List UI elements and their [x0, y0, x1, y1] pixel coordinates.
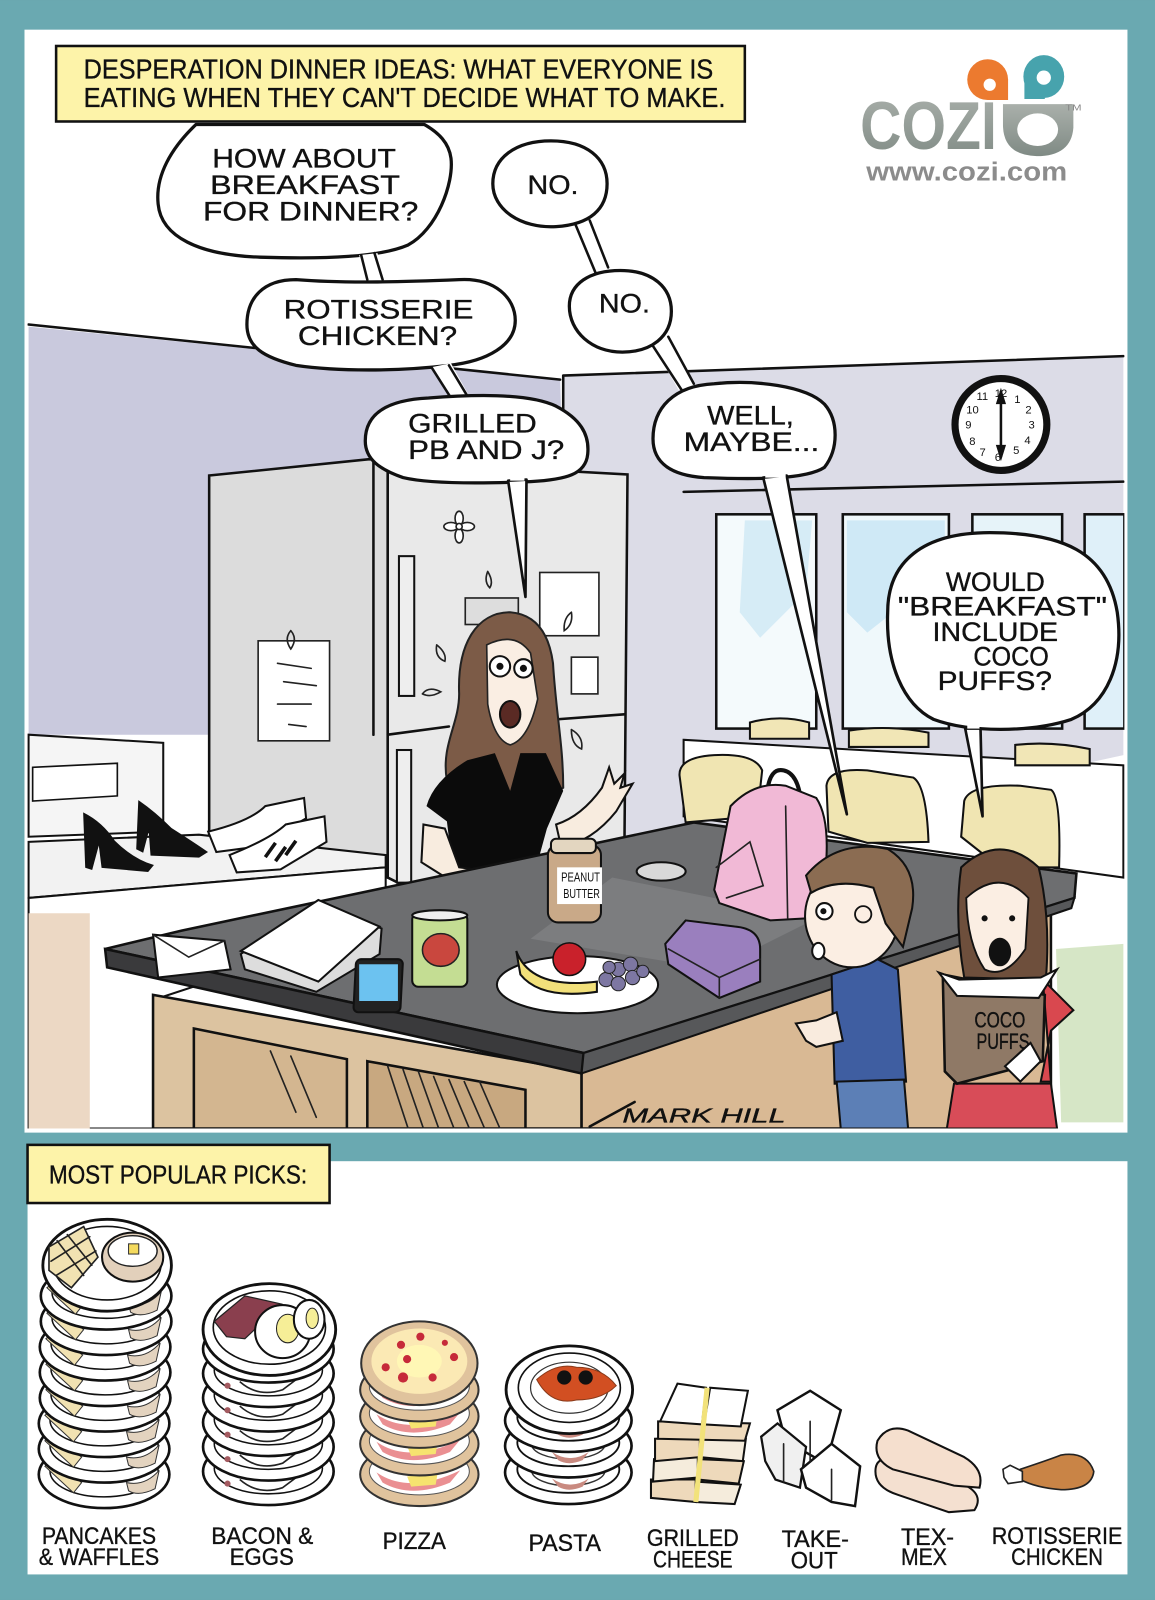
envelope	[153, 935, 231, 978]
food labels: PIZZA	[383, 1528, 446, 1555]
food labels: EGGS	[230, 1544, 294, 1571]
clock: 10	[966, 404, 979, 416]
speech bubble: well maybe: WELL,	[707, 401, 794, 431]
note on fridge side	[258, 631, 330, 741]
peanut butter jar: PEANUT	[561, 870, 600, 885]
speech bubble: no: NO.	[528, 170, 579, 200]
food labels: ROTISSERIE	[992, 1523, 1122, 1550]
food labels: BACON &	[211, 1523, 313, 1550]
left wall	[29, 327, 563, 735]
clock: 5	[1013, 445, 1019, 457]
coco puffs box	[939, 969, 1057, 1084]
takeout boxes	[761, 1391, 860, 1506]
food labels: & WAFFLES	[39, 1544, 159, 1571]
panel: popular picks	[28, 1145, 1127, 1574]
speech bubble: coco puffs: INCLUDE	[933, 617, 1058, 647]
stack: pizza	[360, 1321, 479, 1506]
food labels: OUT	[791, 1547, 838, 1574]
clock	[955, 379, 1047, 470]
food labels: GRILLED	[647, 1525, 739, 1552]
speech bubble: rotisserie chicken	[247, 253, 515, 370]
food labels: TEX-	[901, 1524, 954, 1551]
boy	[796, 847, 913, 1129]
speech bubble: how about breakfast: BREAKFAST	[210, 170, 400, 200]
clock: 6	[995, 452, 1001, 464]
clock: 2	[1025, 404, 1032, 416]
logo: cozi: COZI	[860, 89, 997, 164]
stack: pasta	[505, 1346, 633, 1504]
magnets and notes	[422, 511, 599, 749]
papers	[241, 900, 382, 992]
clock: 3	[1028, 420, 1035, 432]
speech bubble: grilled pb and j: PB AND J?	[408, 435, 564, 465]
speech bubble: how about breakfast: HOW ABOUT	[212, 143, 396, 173]
speech bubble: rotisserie chicken: ROTISSERIE	[284, 294, 473, 324]
coco puffs box: COCO	[974, 1008, 1025, 1033]
fridge	[209, 459, 627, 888]
speech bubble: how about breakfast: FOR DINNER?	[203, 196, 418, 226]
green floor	[1056, 944, 1123, 1122]
logo: cozi: www.cozi.com	[865, 159, 1067, 187]
food labels: CHICKEN	[1011, 1544, 1103, 1571]
speech bubble: grilled pb and j: GRILLED	[408, 409, 537, 439]
stack: pancakes and waffles	[39, 1219, 171, 1508]
backpack	[714, 770, 827, 920]
heading: most popular picks: MOST POPULAR PICKS:	[49, 1162, 307, 1190]
logo: cozi	[860, 55, 1082, 187]
girl	[939, 849, 1073, 1129]
speech bubble: coco puffs: PUFFS?	[938, 666, 1052, 696]
heading: most popular picks	[28, 1145, 330, 1203]
clock: 1	[1014, 394, 1020, 406]
speech bubble: coco puffs: COCO	[973, 641, 1049, 671]
left counter	[29, 735, 386, 1129]
peanut butter jar	[548, 839, 602, 922]
speech bubble: well maybe	[653, 383, 847, 814]
speech bubble: no	[493, 141, 608, 274]
panel: kitchen cartoon	[24, 30, 1127, 1133]
food labels: TAKE-	[782, 1526, 849, 1553]
food labels: PANCAKES	[42, 1523, 156, 1550]
food labels: CHEESE	[653, 1546, 733, 1573]
speech bubble: coco puffs: WOULD	[946, 567, 1045, 597]
speech bubble: no second: NO.	[599, 288, 650, 318]
speech bubble: how about breakfast	[158, 125, 451, 258]
stack: grilled cheese	[651, 1384, 750, 1504]
phone	[353, 959, 403, 1012]
rotisserie chicken leg	[1003, 1454, 1094, 1490]
woman	[421, 612, 633, 896]
tex-mex burritos	[875, 1428, 981, 1512]
speech bubble: coco puffs: "BREAKFAST"	[898, 591, 1107, 621]
clock: 12	[995, 388, 1007, 400]
clock: 8	[969, 436, 976, 448]
title box: DESPERATION DINNER IDEAS: WHAT EVERYONE IS	[84, 54, 713, 85]
food labels: MEX	[901, 1544, 947, 1571]
lunchbox	[665, 920, 760, 998]
speech bubble: coco puffs	[888, 533, 1119, 816]
coco puffs box: PUFFS	[976, 1029, 1030, 1054]
right wall	[563, 356, 1123, 878]
speech bubble: no second	[569, 270, 694, 390]
clock: 11	[976, 391, 988, 403]
food labels: PASTA	[529, 1530, 602, 1557]
clock: 9	[965, 420, 971, 432]
logo: cozi: TM	[1065, 103, 1082, 112]
peanut butter jar: BUTTER	[563, 886, 600, 901]
tomato can	[412, 910, 467, 987]
windows	[716, 514, 1124, 729]
clock: 7	[980, 447, 986, 459]
signature: MARK HILL	[622, 1105, 786, 1127]
food labels	[39, 1523, 1122, 1574]
speech bubble: well maybe: MAYBE...	[684, 427, 819, 457]
signature	[590, 1102, 786, 1127]
stack: bacon and eggs	[203, 1284, 336, 1505]
shoes	[84, 798, 327, 872]
back counter and chairs	[680, 718, 1123, 878]
clock: 4	[1024, 435, 1031, 447]
speech bubble: rotisserie chicken: CHICKEN?	[298, 321, 457, 351]
jar lid	[637, 862, 686, 881]
kitchen island	[105, 822, 1076, 1129]
fruit plate	[497, 943, 658, 1013]
title box	[56, 46, 745, 121]
title box: EATING WHEN THEY CAN'T DECIDE WHAT TO MAKE.	[84, 82, 725, 113]
speech bubble: grilled pb and j	[365, 363, 588, 597]
